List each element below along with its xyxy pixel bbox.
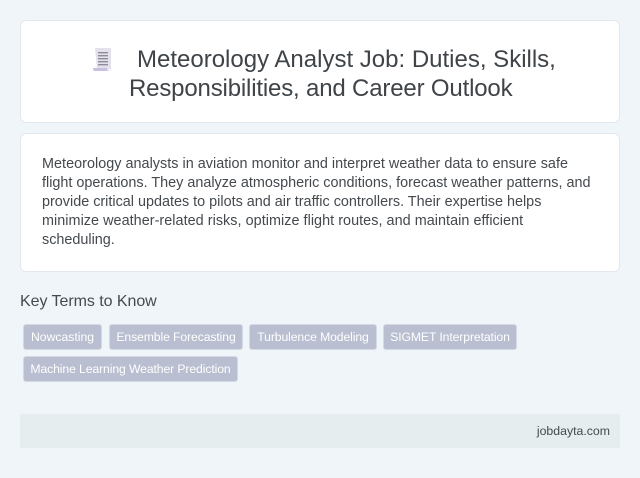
title: Meteorology Analyst Job: Duties, Skills, [137,46,556,73]
tag list [23,324,517,382]
tag: Machine Learning Weather Prediction [23,356,238,382]
text block: description: scheduling. [42,232,115,248]
text block: description: flight operations. They analyze atmospheric conditions, forecast weather patterns, and [42,175,590,191]
footer text: jobdayta.com [537,424,610,438]
text block: description: provide critical updates to pilots and air traffic controllers. Their expertise helps [42,194,541,210]
panel: title card [20,20,620,123]
tag: Ensemble Forecasting [109,324,243,350]
heading: key terms: Key Terms to Know [20,293,157,310]
tag: Turbulence Modeling [249,324,377,350]
title: Responsibilities, and Career Outlook [129,75,512,102]
text block: description: Meteorology analysts in aviation monitor and interpret weather data to ensure safe [42,156,568,172]
tag: Turbulence Modeling: Turbulence Modeling [257,330,369,344]
icon: document scroll [93,48,111,71]
tag: Machine Learning Weather Prediction: Machine Learning Weather Prediction [30,362,231,376]
text block: description: minimize weather-related risks, optimize flight routes, and maintain efficient [42,213,523,229]
footer bar [20,414,620,448]
panel: description [20,133,620,272]
tag: Nowcasting: Nowcasting [31,330,94,344]
tag: SIGMET Interpretation: SIGMET Interpretation [390,330,510,344]
tag: Ensemble Forecasting: Ensemble Forecasting [116,330,236,344]
tag: Nowcasting [23,324,102,350]
text block: description [42,156,590,248]
title [129,46,556,102]
tag: SIGMET Interpretation [383,324,517,350]
